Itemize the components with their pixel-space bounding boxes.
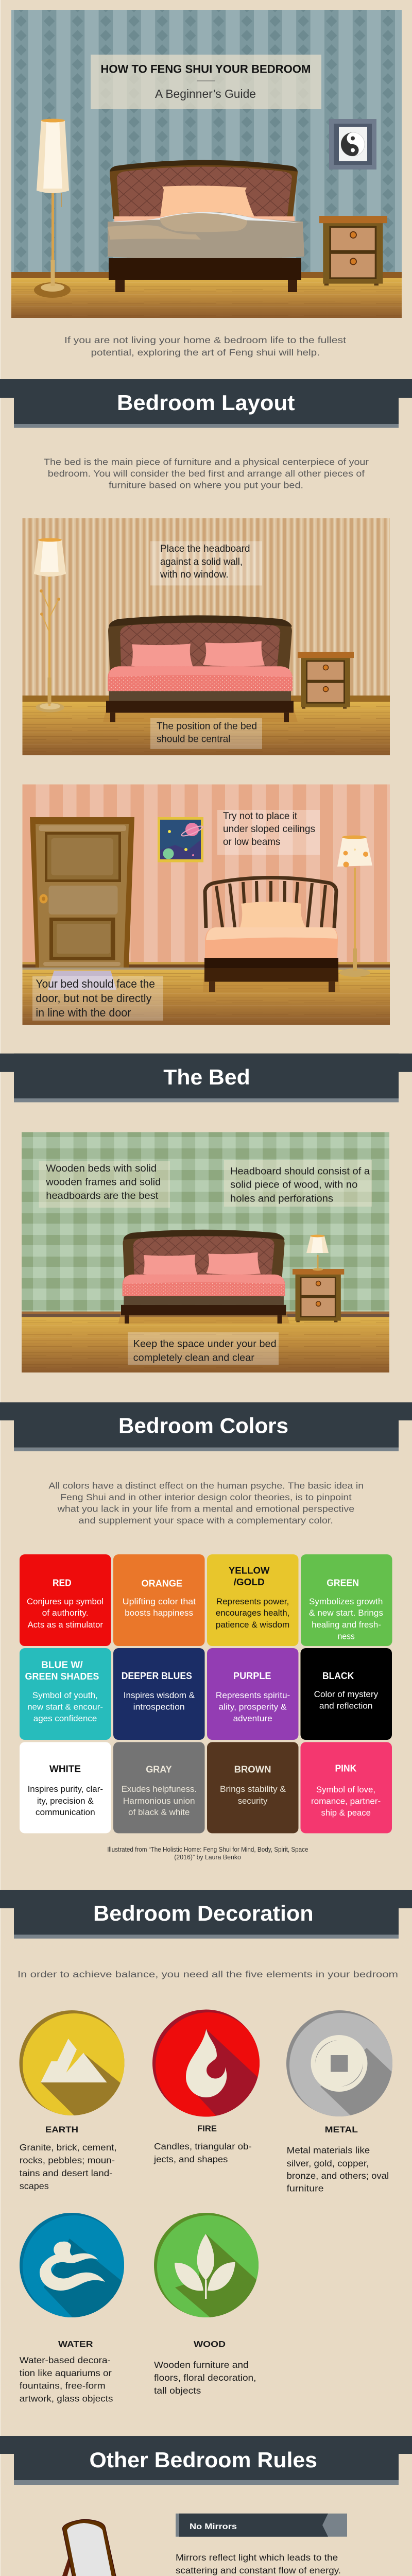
callout: face the door: Your bed should face the xyxy=(36,977,155,990)
card: purple: adventure xyxy=(233,1714,272,1723)
card: pink xyxy=(301,1742,392,1833)
callout: wooden beds xyxy=(39,1161,170,1208)
card: purple: PURPLE xyxy=(233,1670,271,1681)
callout: face the door: in line with the door xyxy=(36,1006,131,1019)
heading: Other Bedroom Rules: Other Bedroom Rules xyxy=(90,2448,317,2472)
icon: yin yang picture xyxy=(329,119,376,170)
icon: bed xyxy=(108,160,304,292)
layout text xyxy=(44,456,369,490)
card: black xyxy=(301,1648,392,1740)
icon: floor lamp xyxy=(34,118,71,298)
card: red: Acts as a stimulator xyxy=(28,1620,103,1630)
card: blue with green shades: BLUE W/ xyxy=(41,1659,83,1670)
element: fire: Candles, triangular ob- xyxy=(154,2141,252,2151)
card: pink: Symbol of love, xyxy=(316,1785,375,1794)
title: HOW TO FENG SHUI YOUR BEDROOM xyxy=(100,63,311,75)
callout: sloped ceilings: or low beams xyxy=(223,836,280,848)
element: water: Water-based decora- xyxy=(20,2355,111,2365)
icon: nightstand xyxy=(293,1269,344,1322)
element: wood: Wooden furniture and xyxy=(154,2360,249,2370)
card: blue with green shades xyxy=(20,1648,111,1740)
card: red xyxy=(20,1554,111,1646)
callout: headboard: Headboard should consist of a xyxy=(230,1165,370,1177)
intro text xyxy=(64,335,346,358)
element: fire: jects, and shapes xyxy=(153,2154,228,2164)
heading: The Bed: The Bed xyxy=(163,1065,250,1089)
element: metal: bronze, and others; oval xyxy=(287,2171,389,2181)
element: wood: tall objects xyxy=(154,2385,201,2396)
card: white: communication xyxy=(36,1807,95,1817)
colors text: what you lack in your life from a mental and emotional perspective xyxy=(57,1503,354,1514)
icon: door mat xyxy=(48,971,116,990)
card: red: Conjures up symbol xyxy=(27,1597,104,1606)
callout: under bed: completely clean and clear xyxy=(133,1352,254,1363)
element: water: fountains, free-form xyxy=(20,2380,106,2391)
callout: sloped ceilings: under sloped ceilings xyxy=(223,823,315,835)
card: deeper blues: introspection xyxy=(133,1702,185,1711)
card: green: healing and fresh- xyxy=(312,1620,381,1630)
card: purple: Represents spiritu- xyxy=(216,1690,290,1700)
colors text xyxy=(48,1481,364,1526)
card: yellow gold xyxy=(207,1554,299,1646)
card: black: Color of mystery xyxy=(314,1689,379,1699)
element: water xyxy=(20,2213,130,2404)
panel: door and ceiling xyxy=(23,784,390,1025)
card: gray: of black & white xyxy=(128,1807,190,1817)
card: green: & new start. Brings xyxy=(309,1608,383,1618)
icon: water xyxy=(20,2213,124,2317)
icon: floor lamp xyxy=(34,538,66,712)
heading: Bedroom Decoration xyxy=(0,1890,412,1939)
element: water: artwork, glass objects xyxy=(20,2394,113,2404)
layout text: The bed is the main piece of furniture and a physical centerpiece of your xyxy=(44,456,369,467)
callout: position xyxy=(150,718,262,749)
icon: nightstand xyxy=(298,652,354,709)
icon: space picture xyxy=(158,817,203,862)
element: metal: furniture xyxy=(287,2183,324,2194)
intro text: potential, exploring the art of Feng shui will help. xyxy=(91,347,320,358)
intro text: If you are not living your home & bedroom life to the fullest xyxy=(64,335,346,345)
callout: headboard: solid piece of wood, with no xyxy=(230,1179,358,1191)
card: pink: romance, partner- xyxy=(311,1796,381,1806)
layout text: bedroom. You will consider the bed first and arrange all other pieces of xyxy=(48,468,365,479)
citation: Illustrated from “The Holistic Home: Feng Shui for Mind, Body, Spirit, Space xyxy=(107,1845,308,1853)
element: earth: rocks, pebbles; moun- xyxy=(20,2155,115,2165)
element: fire xyxy=(152,2009,268,2164)
card: brown xyxy=(207,1742,299,1833)
callout: sloped ceilings xyxy=(217,810,320,855)
card: green: ness xyxy=(338,1631,355,1641)
card: green: GREEN xyxy=(327,1578,359,1588)
callout: headboard: Place the headboard xyxy=(160,543,250,554)
element: metal: silver, gold, copper, xyxy=(287,2158,369,2168)
icon: wood xyxy=(154,2213,259,2317)
card: orange xyxy=(113,1554,205,1646)
heading: Bedroom Layout: Bedroom Layout xyxy=(117,391,295,415)
element: water: WATER xyxy=(58,2339,93,2349)
card: green xyxy=(301,1554,392,1646)
element: earth: Granite, brick, cement, xyxy=(20,2142,117,2153)
rule: no mirrors xyxy=(58,2514,348,2576)
callout: headboard: with no window. xyxy=(160,569,229,580)
icon: mirror xyxy=(58,2519,118,2576)
card: yellow gold: patience & wisdom xyxy=(216,1620,289,1630)
hero illustration xyxy=(11,10,402,318)
card: pink: PINK xyxy=(335,1763,357,1773)
element: earth: tains and desert land- xyxy=(20,2168,113,2178)
heading: The Bed xyxy=(0,1054,412,1103)
card: deeper blues: DEEPER BLUES xyxy=(122,1670,192,1681)
card: blue with green shades: Symbol of youth, xyxy=(32,1690,98,1700)
card: white: ity, precision & xyxy=(37,1796,94,1806)
card: pink: ship & peace xyxy=(321,1808,371,1818)
card: deeper blues xyxy=(113,1648,205,1740)
callout: position: The position of the bed xyxy=(157,720,257,732)
card: purple: ality, prosperity & xyxy=(218,1702,287,1711)
card: yellow gold: encourages health, xyxy=(216,1608,289,1618)
callout: face the door: door, but not be directly xyxy=(36,992,151,1005)
icon: nightstand xyxy=(319,216,387,285)
ribbon: No Mirrors xyxy=(190,2522,237,2531)
callout: sloped ceilings: Try not to place it xyxy=(223,810,298,822)
citation xyxy=(107,1845,308,1861)
element: earth: EARTH xyxy=(45,2125,78,2134)
icon: polka lamp xyxy=(337,836,372,977)
card: yellow gold: YELLOW xyxy=(229,1565,270,1575)
citation: (2016)” by Laura Benko xyxy=(174,1853,241,1861)
card: brown: security xyxy=(238,1796,268,1806)
heading: Bedroom Decoration: Bedroom Decoration xyxy=(93,1901,314,1925)
element: wood: floors, floral decoration, xyxy=(154,2372,256,2383)
title box xyxy=(91,55,321,109)
callout: position: should be central xyxy=(157,734,230,745)
panel: the bed xyxy=(22,1132,389,1372)
heading: Bedroom Colors: Bedroom Colors xyxy=(118,1414,288,1437)
colors text: Feng Shui and in other interior design color theories, is to pinpoint xyxy=(60,1492,352,1502)
colors text: All colors have a distinct effect on the human psyche. The basic idea in xyxy=(48,1481,364,1491)
card: blue with green shades: ages confidence xyxy=(33,1714,97,1723)
icon: bed xyxy=(118,1230,289,1324)
colors text: and supplement your space with a complementary color. xyxy=(78,1515,333,1526)
card: yellow gold: /GOLD xyxy=(234,1577,265,1587)
card: deeper blues: Inspires wisdom & xyxy=(124,1690,195,1700)
card: orange: Uplifting color that xyxy=(123,1597,196,1606)
card: orange: boosts happiness xyxy=(125,1608,193,1618)
text: scattering and constant flow of energy. xyxy=(176,2565,341,2575)
card: blue with green shades: new start & encour- xyxy=(27,1702,103,1711)
element: fire: FIRE xyxy=(197,2124,217,2133)
card: gray xyxy=(113,1742,205,1833)
element: metal xyxy=(286,2010,399,2194)
callout: wooden beds: wooden frames and solid xyxy=(45,1177,161,1188)
panel: headboard placement xyxy=(23,518,390,755)
element: wood: WOOD xyxy=(194,2339,226,2349)
subtitle: A Beginner’s Guide xyxy=(155,87,256,100)
callout: headboard xyxy=(224,1160,372,1207)
heading: Bedroom Layout xyxy=(0,379,412,428)
icon: metal coin xyxy=(286,2010,392,2116)
icon: slatted bed xyxy=(203,878,340,992)
element: earth: scapes xyxy=(20,2181,49,2191)
layout text: furniture based on where you put your bed. xyxy=(109,480,303,490)
icon: earth xyxy=(20,2010,129,2119)
callout: face the door xyxy=(32,976,163,1021)
card: gray: Exudes helpfuness. xyxy=(122,1784,197,1794)
card: red: of authority. xyxy=(42,1608,89,1618)
ribbon xyxy=(176,2514,347,2537)
element: wood xyxy=(154,2213,268,2396)
card: orange: ORANGE xyxy=(141,1578,182,1589)
element: metal: Metal materials like xyxy=(287,2145,370,2156)
panel: color grid xyxy=(20,1554,392,1833)
callout: wooden beds: headboards are the best xyxy=(46,1190,159,1201)
icon: door xyxy=(30,817,134,968)
icon: fire xyxy=(152,2009,260,2116)
card: white xyxy=(20,1742,111,1833)
heading: Other Bedroom Rules xyxy=(0,2436,412,2485)
callout: under bed: Keep the space under your bed xyxy=(133,1338,277,1350)
card: red: RED xyxy=(53,1578,72,1588)
card: black: BLACK xyxy=(322,1670,354,1681)
icon: table lamp xyxy=(306,1234,329,1270)
card: black: and reflection xyxy=(319,1701,373,1710)
element: metal: METAL xyxy=(325,2125,358,2134)
card: yellow gold: Represents power, xyxy=(216,1597,289,1606)
card: white: Inspires purity, clar- xyxy=(28,1784,103,1794)
card: brown: Brings stability & xyxy=(220,1784,286,1794)
card: white: WHITE xyxy=(49,1763,81,1774)
callout: headboard: against a solid wall, xyxy=(160,556,243,568)
text: Mirrors reflect light which leads to the xyxy=(176,2552,338,2563)
callout: headboard xyxy=(150,541,262,585)
card: gray: Harmonious union xyxy=(123,1796,195,1806)
card: gray: GRAY xyxy=(146,1764,172,1774)
card: brown: BROWN xyxy=(234,1764,271,1774)
element: water: tion like aquariums or xyxy=(20,2368,112,2378)
heading: Bedroom Colors xyxy=(0,1402,412,1451)
callout: wooden beds: Wooden beds with solid xyxy=(46,1163,157,1174)
card: green: Symbolizes growth xyxy=(309,1597,383,1606)
callout: under bed xyxy=(128,1332,279,1365)
decoration text: In order to achieve balance, you need all the five elements in your bedroom xyxy=(18,1969,398,1979)
text xyxy=(176,2552,348,2576)
card: blue with green shades: GREEN SHADES xyxy=(25,1671,99,1682)
element: earth xyxy=(20,2010,129,2191)
icon: bed xyxy=(103,615,298,722)
card: purple xyxy=(207,1648,299,1740)
callout: headboard: holes and perforations xyxy=(230,1193,333,1205)
